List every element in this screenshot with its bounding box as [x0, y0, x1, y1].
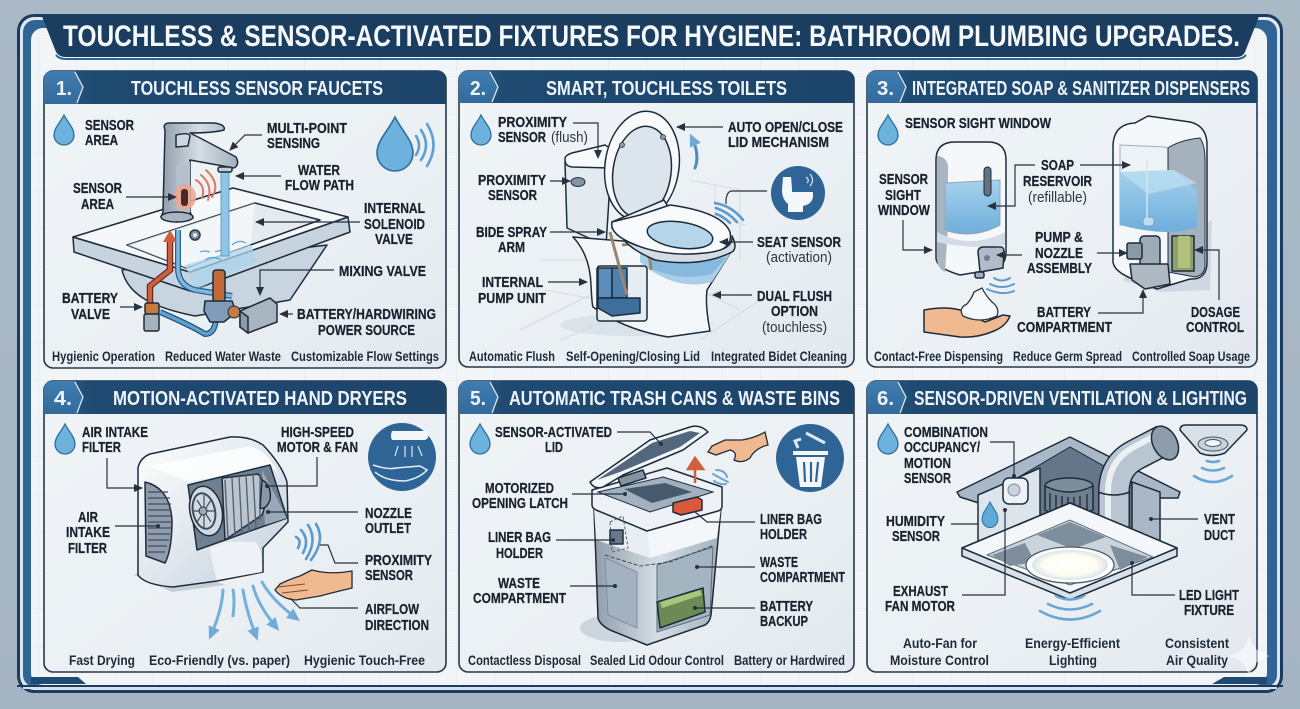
icon: water drop: [878, 424, 898, 454]
dispenser labels: (refillable): [1028, 190, 1087, 206]
dispenser labels: ASSEMBLY: [1027, 261, 1092, 277]
dryer labels: AIR INTAKE: [82, 425, 148, 441]
toilet labels: AUTO OPEN/CLOSE: [728, 120, 843, 136]
dispenser labels: BATTERY: [1037, 305, 1091, 321]
toilet labels: PROXIMITY: [498, 115, 567, 131]
toilet labels: (flush): [551, 130, 588, 146]
toilet labels: SEAT SENSOR: [757, 235, 841, 251]
toilet labels: [476, 115, 843, 336]
benefits row 6: Energy-Efficient: [1025, 635, 1120, 651]
dryer labels: SENSOR: [365, 568, 413, 584]
bin labels: LID: [545, 440, 563, 456]
benefits row 3: Controlled Soap Usage: [1132, 348, 1250, 364]
dispenser labels: SIGHT: [885, 188, 921, 204]
faucet labels: SENSOR: [85, 118, 134, 134]
panel 5 heading: [459, 381, 854, 414]
faucet labels: AREA: [81, 197, 114, 213]
dryer labels: INTAKE: [66, 525, 110, 541]
ventilation labels: COMBINATION: [904, 425, 988, 441]
bin labels: LINER BAG: [488, 530, 551, 546]
icon: water drop with signal waves: [377, 117, 434, 171]
benefits row 6: Consistent: [1165, 635, 1229, 651]
ventilation labels: SENSOR: [904, 471, 951, 487]
bin labels: COMPARTMENT: [473, 591, 566, 607]
benefits row 2: [469, 348, 847, 364]
panel 6 heading: [867, 381, 1257, 414]
panel 4 heading: 4.: [54, 388, 72, 410]
arrow leaders: dispenser callouts: [903, 165, 1219, 313]
bin labels: HOLDER: [496, 546, 543, 562]
arrow leaders: toilet callouts: [548, 123, 753, 295]
ventilation labels: FIXTURE: [1184, 603, 1234, 619]
toilet labels: SENSOR: [488, 188, 537, 204]
panel 5 heading: 5.: [470, 388, 486, 410]
bin labels: COMPARTMENT: [760, 570, 845, 586]
dispenser labels: SENSOR SIGHT WINDOW: [905, 116, 1051, 132]
dispenser labels: COMPARTMENT: [1017, 320, 1112, 336]
benefits row 3: [874, 348, 1250, 364]
bin labels: OPENING LATCH: [472, 496, 568, 512]
ventilation labels: EXHAUST: [893, 584, 948, 600]
faucet labels: FLOW PATH: [285, 178, 354, 194]
ventilation labels: VENT: [1204, 512, 1235, 528]
bin labels: HOLDER: [760, 527, 807, 543]
benefits row 5: [468, 652, 845, 668]
faucet labels: SOLENOID: [364, 217, 425, 233]
illustration: hand dryer: [134, 423, 436, 636]
bin labels: BACKUP: [760, 614, 808, 630]
ventilation labels: FAN MOTOR: [885, 599, 955, 615]
toilet labels: BIDE SPRAY: [476, 225, 547, 241]
benefits row 4: Hygienic Touch-Free: [304, 652, 425, 668]
faucet labels: MIXING VALVE: [339, 264, 426, 280]
toilet labels: INTERNAL: [482, 275, 543, 291]
benefits row 2: Self-Opening/Closing Lid: [566, 348, 700, 364]
bin labels: LINER BAG: [760, 512, 822, 528]
dryer labels: FILTER: [68, 541, 107, 557]
dispenser labels: RESERVOIR: [1023, 174, 1092, 190]
panel 4 heading: MOTION-ACTIVATED HAND DRYERS: [113, 388, 407, 410]
toilet labels: LID MECHANISM: [728, 135, 829, 151]
dryer labels: OUTLET: [365, 521, 411, 537]
illustration: closed dispenser, foam and hand: [924, 142, 1014, 337]
watermark sparkle: [1228, 635, 1270, 677]
ventilation labels: HUMIDITY: [886, 514, 945, 530]
arrow leaders: ventilation callouts: [951, 442, 1198, 595]
toilet labels: DUAL FLUSH: [757, 289, 832, 305]
dryer labels: NOZZLE: [365, 506, 412, 522]
faucet labels: [62, 118, 436, 339]
panel 4 heading: [44, 381, 446, 414]
panel: 3 soap and sanitizer dispensers: [867, 71, 1257, 367]
benefits row 1: [52, 348, 439, 364]
bin labels: SENSOR-ACTIVATED: [495, 425, 612, 441]
arrow leaders: bin callouts: [556, 432, 755, 608]
ventilation labels: SENSOR: [892, 529, 940, 545]
dispenser labels: SENSOR: [879, 172, 928, 188]
benefits row 2: Integrated Bidet Cleaning: [711, 348, 847, 364]
benefits row 5: Contactless Disposal: [468, 652, 581, 668]
benefits row 1: Customizable Flow Settings: [291, 348, 439, 364]
bin labels: WASTE: [760, 555, 798, 571]
toilet labels: (activation): [766, 250, 832, 266]
panel 1 heading: TOUCHLESS SENSOR FAUCETS: [131, 78, 383, 100]
dryer labels: AIRFLOW: [365, 602, 419, 618]
dispenser labels: DOSAGE: [1191, 305, 1240, 321]
faucet labels: AREA: [85, 133, 118, 149]
panel 5 heading: AUTOMATIC TRASH CANS & WASTE BINS: [509, 388, 840, 410]
ventilation labels: [885, 425, 1239, 619]
benefits row 4: Fast Drying: [69, 652, 135, 668]
arrow leaders: dryer callouts: [107, 457, 358, 608]
benefits row 6: Auto-Fan for: [903, 635, 977, 651]
dryer labels: PROXIMITY: [365, 553, 432, 569]
bin labels: [472, 425, 845, 630]
panel 1 heading: 1.: [56, 78, 72, 100]
panel: 1 touchless sensor faucets: [44, 71, 446, 368]
panel: 2 smart touchless toilets: [459, 71, 854, 367]
panel: 4 motion-activated hand dryers: [44, 381, 446, 672]
illustration: ventilation fan with LED light: [957, 421, 1247, 620]
benefits row 5: Battery or Hardwired: [734, 652, 845, 668]
toilet labels: SENSOR: [498, 130, 546, 146]
dispenser labels: CONTROL: [1186, 320, 1244, 336]
illustration: sensor faucet and sink: [73, 123, 350, 334]
icon: water drop: [471, 115, 491, 145]
toilet labels: PUMP UNIT: [478, 291, 546, 307]
benefits row 4: Eco-Friendly (vs. paper): [149, 652, 290, 668]
benefits row 6: Lighting: [1049, 652, 1097, 668]
panel 6 heading: 6.: [877, 388, 894, 410]
dryer labels: AIR: [78, 510, 98, 526]
dispenser labels: [878, 116, 1244, 336]
panel 2 heading: SMART, TOUCHLESS TOILETS: [546, 78, 787, 100]
toilet labels: OPTION: [771, 304, 818, 320]
benefits row 1: Hygienic Operation: [52, 348, 155, 364]
panel 1 heading: [44, 71, 446, 104]
faucet labels: POWER SOURCE: [318, 323, 415, 339]
benefits row 2: Automatic Flush: [469, 348, 555, 364]
panel 3 heading: 3.: [877, 78, 894, 100]
faucet labels: BATTERY: [62, 291, 118, 307]
faucet labels: MULTI-POINT: [267, 121, 347, 137]
faucet labels: SENSING: [267, 136, 320, 152]
bin labels: BATTERY: [760, 599, 813, 615]
ventilation labels: MOTION: [904, 456, 951, 472]
faucet labels: VALVE: [71, 307, 110, 323]
benefits row 3: Reduce Germ Spread: [1013, 348, 1122, 364]
benefits row 4: [69, 652, 425, 668]
benefits row 6: Air Quality: [1166, 652, 1228, 668]
dryer labels: DIRECTION: [365, 618, 429, 634]
toilet labels: ARM: [498, 240, 525, 256]
bin labels: MOTORIZED: [485, 481, 554, 497]
dispenser labels: SOAP: [1041, 158, 1074, 174]
illustration: automatic bin: [580, 424, 844, 645]
benefits row 6: Moisture Control: [890, 652, 989, 668]
icon: water drop: [55, 424, 75, 454]
title banner: [41, 14, 1260, 59]
benefits row 6: [890, 635, 1229, 668]
dispenser labels: WINDOW: [878, 203, 930, 219]
faucet labels: VALVE: [375, 232, 413, 248]
dispenser labels: PUMP &: [1035, 230, 1083, 246]
panel 2 heading: 2.: [470, 78, 486, 100]
benefits row 5: Sealed Lid Odour Control: [590, 652, 724, 668]
arrow leaders: faucet callouts: [120, 135, 360, 314]
ventilation labels: LED LIGHT: [1179, 588, 1239, 604]
icon: water drop: [470, 424, 490, 454]
toilet labels: (touchless): [762, 320, 827, 336]
illustration: smart toilet: [520, 106, 825, 340]
faucet labels: BATTERY/HARDWIRING: [297, 307, 436, 323]
faucet labels: WATER: [298, 163, 340, 179]
dispenser labels: NOZZLE: [1035, 246, 1083, 262]
panel: 6 ventilation and lighting: [867, 381, 1257, 672]
dryer labels: [66, 425, 432, 634]
icon: water drop: [54, 115, 74, 145]
dryer labels: FILTER: [82, 440, 121, 456]
benefits row 1: Reduced Water Waste: [165, 348, 281, 364]
panel 3 heading: [867, 71, 1257, 103]
dryer labels: HIGH-SPEED: [281, 425, 354, 441]
panel 2 heading: [459, 71, 854, 103]
illustration: open dispenser cutaway: [1113, 116, 1212, 292]
benefits row 3: Contact-Free Dispensing: [874, 348, 1003, 364]
panel: 5 automatic trash cans: [459, 381, 854, 672]
dryer labels: MOTOR & FAN: [277, 440, 358, 456]
icon: water drop: [878, 115, 898, 145]
faucet labels: SENSOR: [73, 181, 122, 197]
ventilation labels: DUCT: [1204, 528, 1235, 544]
toilet labels: PROXIMITY: [478, 173, 546, 189]
bin labels: WASTE: [498, 576, 540, 592]
faucet labels: INTERNAL: [364, 201, 425, 217]
ventilation labels: OCCUPANCY/: [904, 440, 980, 456]
